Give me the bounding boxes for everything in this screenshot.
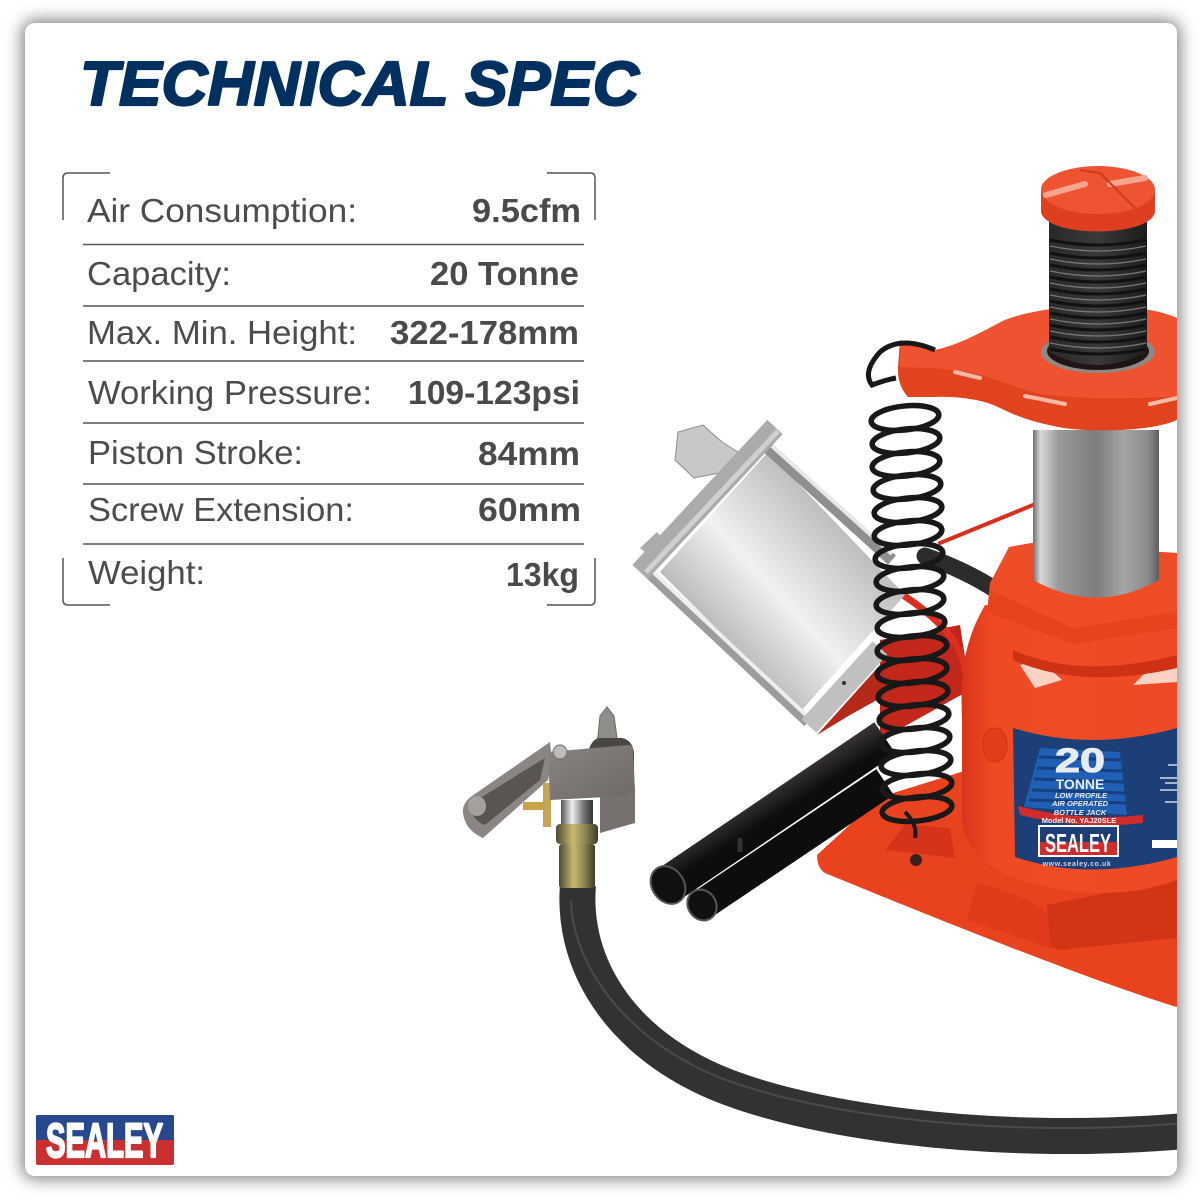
row: max min height	[87, 314, 579, 351]
threaded screw	[1049, 222, 1147, 365]
brand logo: SEALEY	[46, 1115, 163, 1168]
specification table	[63, 173, 595, 605]
row: working pressure: Working Pressure:	[88, 374, 372, 411]
row: air consumption	[87, 192, 581, 229]
coiled spring	[868, 343, 953, 838]
steel ram cylinder	[1033, 430, 1159, 598]
table corner brackets	[63, 173, 595, 605]
row: capacity: Capacity:	[87, 255, 231, 292]
row: weight: Weight:	[88, 554, 205, 591]
row: capacity: 20 Tonne	[430, 255, 579, 292]
lever plate	[548, 745, 635, 800]
product photo: air operated bottle jack	[463, 166, 1185, 1136]
body boss	[983, 728, 1007, 762]
saddle collar arm	[898, 306, 1177, 430]
row: piston stroke	[88, 434, 580, 472]
under block	[600, 790, 635, 833]
screw cap	[1041, 166, 1155, 232]
row: max min height: 322-178mm	[390, 314, 579, 351]
silver barrel	[660, 452, 905, 712]
title: TECHNICAL SPEC	[80, 50, 640, 119]
row: working pressure: 109-123psi	[408, 374, 580, 411]
nozzle	[597, 706, 618, 738]
row: screw extension: Screw Extension:	[88, 491, 354, 528]
row: screw extension: 60mm	[478, 491, 581, 528]
row: working pressure	[88, 374, 580, 411]
bottom end plate	[809, 648, 880, 726]
blue jack label: Model No. YAJ20SLE	[1042, 816, 1116, 825]
chrome collar	[561, 800, 593, 825]
air line hose	[571, 885, 1185, 1136]
tie rods	[648, 446, 892, 722]
air and hydraulic hoses behind the jack	[880, 505, 1033, 740]
brass pin	[523, 802, 545, 810]
top end plate	[640, 427, 778, 572]
black pump handle tubes	[644, 738, 885, 926]
jack base plate	[817, 760, 1177, 1007]
row: piston stroke: 84mm	[478, 435, 580, 472]
row: capacity	[87, 255, 579, 292]
blue jack label: BOTTLE JACK	[1054, 808, 1107, 817]
row: max min height: Max. Min. Height:	[87, 314, 357, 351]
row dividers	[83, 244, 584, 544]
row: piston stroke: Piston Stroke:	[88, 434, 303, 471]
blue jack label: www.sealey.co.uk	[1042, 861, 1111, 868]
jack cylinder body	[962, 605, 1177, 893]
row: weight: 13kg	[506, 556, 579, 593]
bolt	[675, 425, 738, 478]
row: screw extension	[88, 491, 581, 528]
crimped ferrule	[556, 824, 598, 844]
brand logo	[36, 1115, 174, 1168]
hex nut collar	[987, 543, 1177, 677]
blue jack label	[1013, 728, 1177, 870]
blue jack label: LOW PROFILE	[1055, 791, 1108, 800]
jaw	[463, 742, 552, 838]
pneumatic air cylinder	[640, 425, 905, 735]
blue jack label: AIR OPERATED	[1051, 799, 1109, 808]
row: air consumption: Air Consumption:	[87, 192, 357, 229]
blue jack label: 20	[1055, 742, 1105, 780]
blue jack label: SEALEY	[1045, 828, 1111, 858]
red area behind lower plate	[817, 665, 895, 735]
air chuck	[463, 707, 635, 888]
row: weight	[88, 554, 579, 593]
row: air consumption: 9.5cfm	[472, 192, 581, 229]
blue jack label: TONNE	[1056, 776, 1104, 792]
